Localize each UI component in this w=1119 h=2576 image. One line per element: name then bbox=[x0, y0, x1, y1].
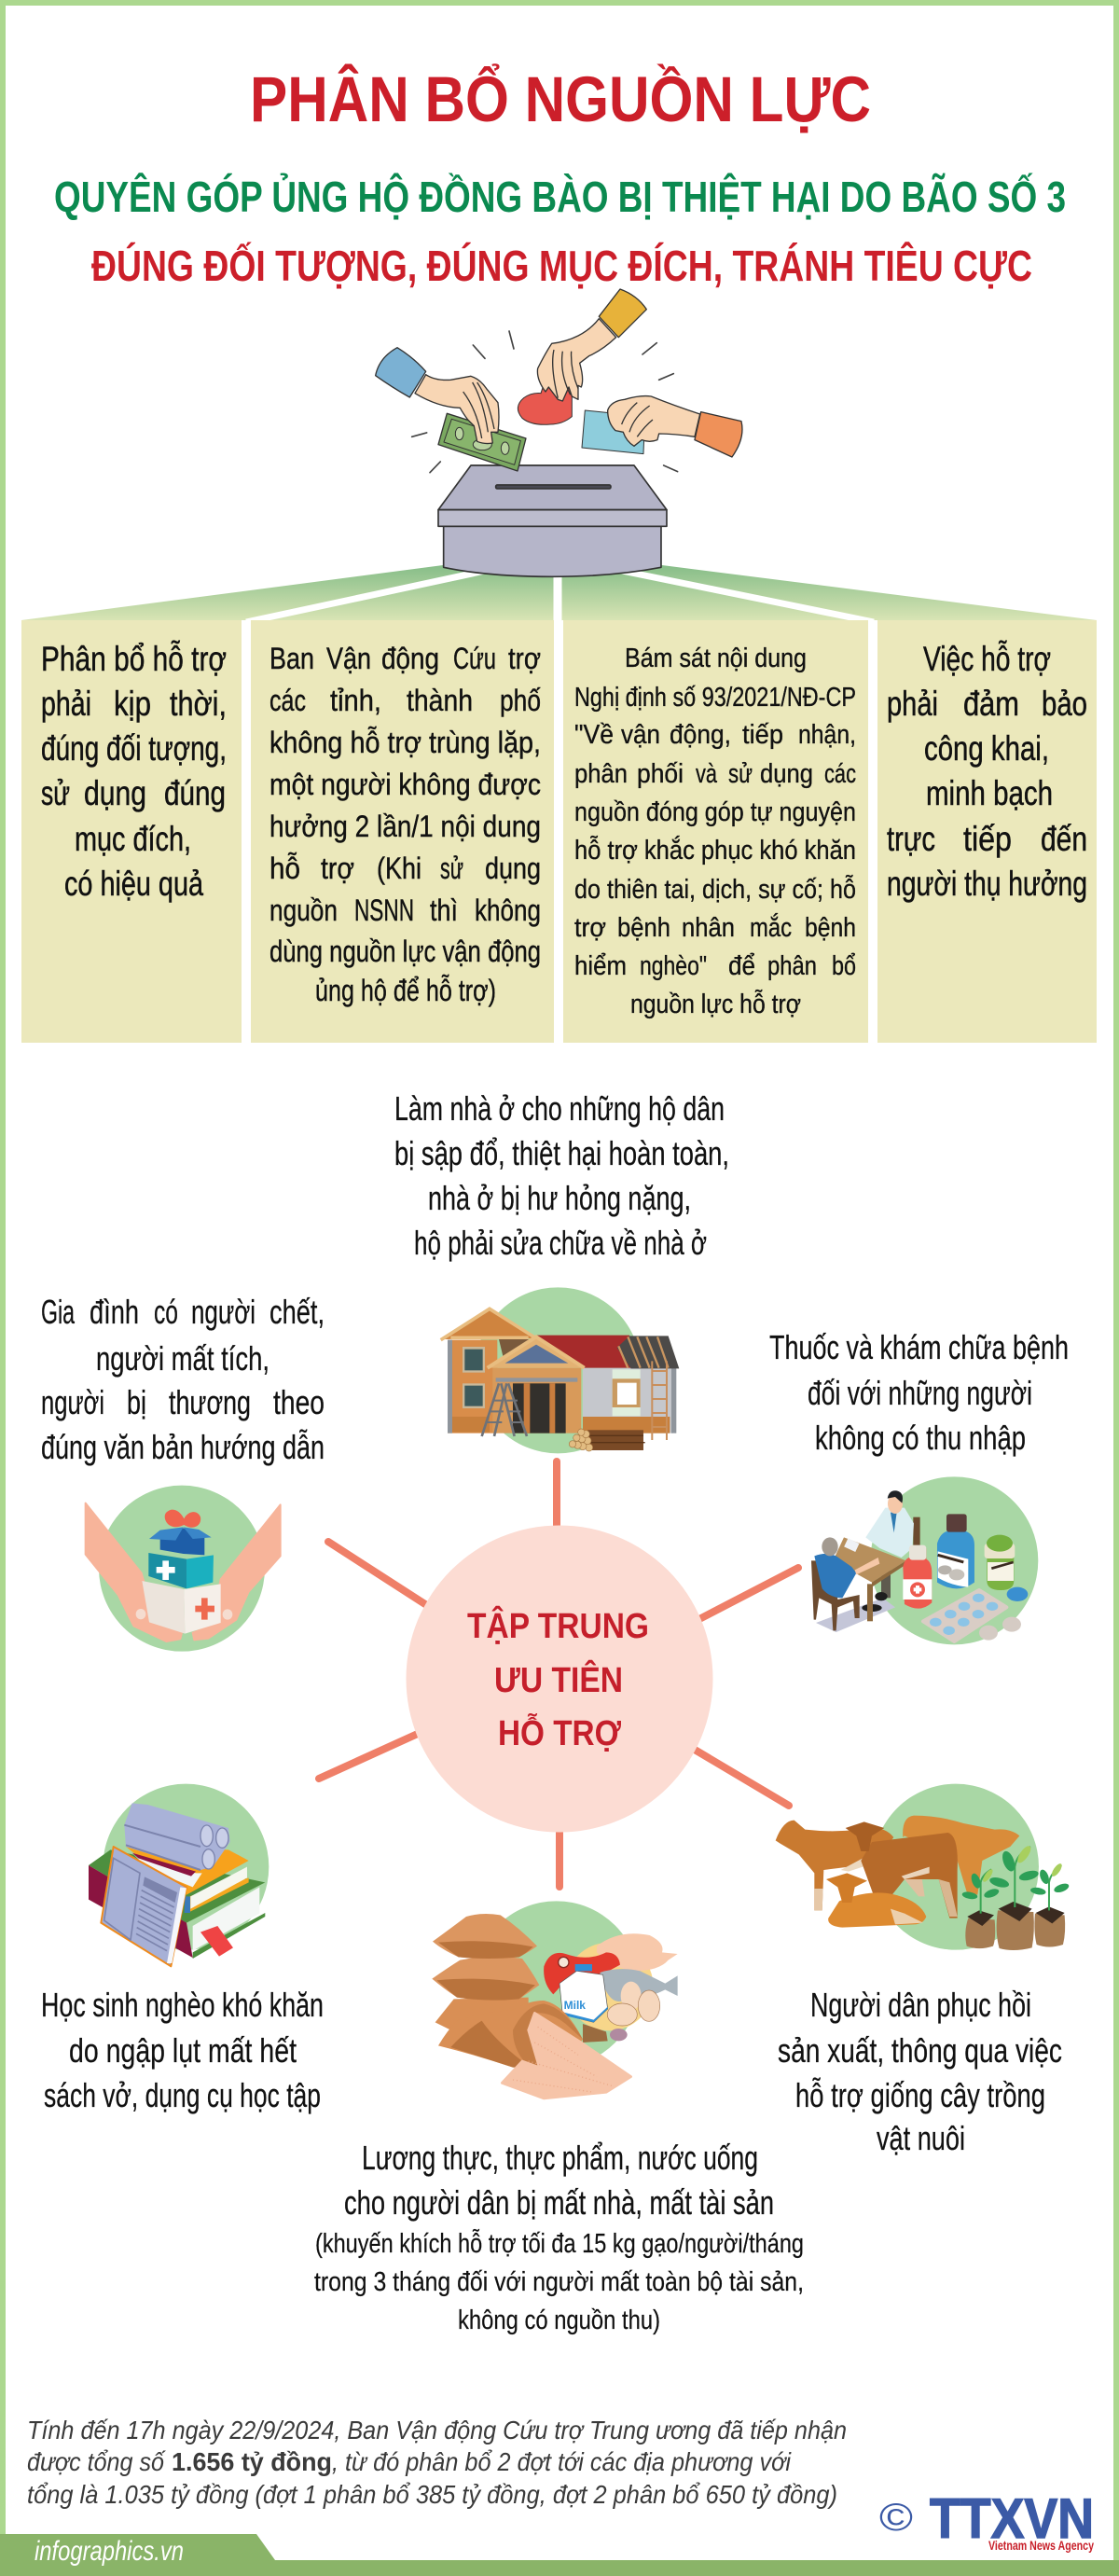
card 2 text: một người không được bbox=[269, 768, 541, 801]
card 3 text: hiểm bbox=[574, 951, 627, 981]
centre circle: priority support bbox=[407, 1526, 712, 1832]
card 3 text: Bám sát nội dung bbox=[625, 644, 807, 673]
card 3 text: nguồn đóng góp tự nguyện bbox=[574, 797, 856, 827]
card 2 text: động bbox=[381, 642, 439, 675]
logo: TTXVN bbox=[879, 2487, 1094, 2553]
site name: infographics.vn bbox=[35, 2536, 184, 2567]
text: livelihood recovery: Người dân phục hồi bbox=[810, 1986, 1031, 2024]
card 4 text: công khai, bbox=[924, 729, 1049, 768]
card 2 text: trợ bbox=[508, 642, 541, 675]
icon: food supplies bbox=[432, 1901, 678, 2098]
card 1 text: dụng bbox=[84, 774, 146, 812]
copyright mark: © bbox=[879, 2495, 913, 2539]
text: livelihood recovery: vật nuôi bbox=[877, 2119, 965, 2157]
red heart bbox=[518, 370, 572, 424]
text: casualties: người bbox=[41, 1383, 104, 1421]
card 4 text: Việc hỗ trợ bbox=[923, 640, 1051, 678]
spokes linking centre to topics bbox=[319, 1461, 798, 1887]
card 1 text: phải bbox=[41, 685, 91, 723]
footnote: Tính đến 17h ngày 22/9/2024, Ban Vận động Cứu trợ Trung ương đã tiếp nhận bbox=[27, 2416, 847, 2444]
text: livelihood recovery: hỗ trợ giống cây trồng bbox=[795, 2076, 1045, 2114]
card 2 text: ủng hộ để hỗ trợ) bbox=[315, 974, 496, 1007]
text: medicine: đối với những người bbox=[808, 1374, 1032, 1412]
card 2 text: các bbox=[269, 684, 306, 717]
card 3 text: bệnh bbox=[617, 913, 670, 943]
card 3 text: các bbox=[824, 759, 856, 789]
card 2 text: không bbox=[475, 893, 541, 927]
card 2 text bbox=[269, 642, 541, 1007]
card 2 text: nguồn bbox=[269, 893, 338, 927]
card 1 text bbox=[41, 640, 227, 903]
text: medicine bbox=[769, 1328, 1069, 1457]
card 3 text: nguồn lực hỗ trợ bbox=[630, 989, 801, 1019]
blue sleeve hand bbox=[376, 348, 499, 444]
text: students: sách vở, dụng cụ học tập bbox=[44, 2076, 321, 2114]
card 3 text: nhân bbox=[682, 913, 735, 943]
text: students: Học sinh nghèo khó khăn bbox=[41, 1986, 324, 2024]
text: casualties bbox=[41, 1293, 325, 1466]
card 2 text: sử bbox=[440, 852, 463, 885]
card 2 text: trợ bbox=[321, 852, 354, 885]
card 4 text: đảm bbox=[963, 685, 1019, 723]
card 2 text: dụng bbox=[485, 852, 541, 885]
card 3 text: phân bbox=[767, 951, 817, 981]
motion dashes bbox=[412, 331, 678, 473]
card 3 text: nghèo" bbox=[640, 951, 707, 981]
card 4 text: tiếp bbox=[963, 820, 1012, 858]
donation box bbox=[438, 465, 667, 576]
text: students bbox=[41, 1986, 324, 2114]
food note: (khuyến khích hỗ trợ tối đa 15 kg gạo/người/tháng bbox=[315, 2228, 804, 2259]
footnote: tổng là 1.035 tỷ đồng (đợt 1 phân bổ 385 tỷ đồng, đợt 2 phân bổ 650 tỷ đồng) bbox=[27, 2480, 837, 2509]
food main text bbox=[344, 2139, 774, 2222]
card 1 text: đúng đối tượng, bbox=[41, 729, 227, 768]
text: casualties: đình bbox=[90, 1293, 139, 1331]
card 4 text: đến bbox=[1041, 820, 1087, 858]
panel: card 1 bbox=[21, 620, 242, 1043]
text: casualties: người bbox=[191, 1293, 256, 1331]
centre heading: TẬP TRUNG bbox=[467, 1605, 649, 1646]
icon: cattle and seedlings bbox=[776, 1784, 1070, 1950]
orange sleeve hand bbox=[608, 396, 742, 457]
icon: hands holding medical gift bbox=[86, 1486, 281, 1652]
card 2 text: Cứu bbox=[453, 642, 496, 675]
text: casualties: Gia bbox=[41, 1293, 76, 1331]
footnote: 1.656 tỷ đồng bbox=[172, 2447, 332, 2476]
card 1 text: thời, bbox=[170, 685, 227, 723]
text: housing: nhà ở bị hư hỏng nặng, bbox=[428, 1179, 691, 1217]
card 1 text: đúng bbox=[164, 774, 226, 812]
card 4 text: trực bbox=[887, 820, 935, 858]
card 3 text: trợ bbox=[574, 913, 606, 943]
card 3 text: để bbox=[728, 951, 755, 981]
card 3 text: phối bbox=[637, 759, 684, 789]
centre heading: HỖ TRỢ bbox=[498, 1711, 622, 1753]
centre heading: ƯU TIÊN bbox=[494, 1659, 623, 1700]
text: casualties: người mất tích, bbox=[96, 1339, 269, 1378]
milk label: Milk bbox=[564, 1999, 586, 2012]
text: casualties: có bbox=[154, 1293, 178, 1331]
card 3 text: bổ bbox=[832, 951, 856, 981]
text: housing: hộ phải sửa chữa về nhà ở bbox=[414, 1224, 707, 1262]
card 2 text: không hỗ trợ trùng lặp, bbox=[269, 726, 541, 759]
card 2 text: hỗ bbox=[269, 852, 300, 885]
icon: house under repair bbox=[441, 1287, 679, 1453]
card 4 text bbox=[887, 640, 1087, 903]
icon: books and school supplies bbox=[89, 1784, 269, 1966]
card 3 text: và bbox=[696, 759, 718, 789]
blue card bbox=[582, 410, 645, 454]
text: medicine: không có thu nhập bbox=[815, 1419, 1026, 1457]
food main text: Lương thực, thực phẩm, nước uống bbox=[362, 2139, 758, 2177]
footnote: được tổng số bbox=[27, 2447, 166, 2476]
text: casualties: chết, bbox=[269, 1293, 325, 1331]
card 1 text: mục đích, bbox=[75, 820, 191, 858]
text: casualties: theo bbox=[273, 1383, 325, 1421]
card 3 text: "Về bbox=[574, 720, 614, 750]
food note: không có nguồn thu) bbox=[458, 2306, 660, 2335]
card 3 text: hỗ trợ khắc phục khó khăn bbox=[574, 835, 856, 866]
card 3 text: do thiên tai, dịch, sự cố; hỗ bbox=[574, 874, 856, 905]
card 2 text: NSNN bbox=[354, 893, 414, 927]
card 2 text: thì bbox=[430, 893, 458, 927]
card 2 text: tỉnh, bbox=[330, 684, 381, 717]
text: casualties: bị bbox=[127, 1383, 146, 1421]
text: food bbox=[314, 2139, 804, 2335]
food note bbox=[314, 2228, 804, 2335]
card 2 text: dùng nguồn lực vận động bbox=[269, 935, 541, 968]
yellow sleeve hand bbox=[537, 289, 646, 401]
text: housing: bị sập đổ, thiệt hại hoàn toàn, bbox=[394, 1134, 729, 1172]
food main text: cho người dân bị mất nhà, mất tài sản bbox=[344, 2183, 774, 2222]
card 3 text: sử bbox=[728, 759, 753, 789]
card 3 text bbox=[574, 644, 856, 1019]
card 2 text: Vận bbox=[326, 642, 371, 675]
text: livelihood recovery bbox=[778, 1986, 1062, 2157]
icon: hands donating into box bbox=[376, 289, 742, 576]
card 2 text: thành bbox=[407, 684, 473, 717]
text: housing bbox=[394, 1089, 729, 1262]
card 4 text: phải bbox=[887, 685, 938, 723]
card 3 text: tiếp bbox=[742, 720, 783, 750]
food note: trong 3 tháng đối với người mất toàn bộ tài sản, bbox=[314, 2267, 804, 2297]
title: PHÂN BỔ NGUỒN LỰC bbox=[250, 63, 871, 135]
agency wordmark: TTXVN bbox=[930, 2487, 1094, 2550]
footer bar with site name bbox=[0, 2534, 1119, 2576]
card 3 text: bệnh bbox=[805, 913, 856, 943]
footnote bbox=[27, 2416, 847, 2509]
panel: card 2 bbox=[251, 620, 554, 1043]
card 3 text: phân bbox=[574, 759, 628, 789]
fan: green connector from box to cards bbox=[21, 565, 1097, 620]
centre heading bbox=[467, 1605, 649, 1753]
card 3 text: động, bbox=[670, 720, 731, 750]
text: students: do ngập lụt mất hết bbox=[69, 2031, 297, 2070]
card 1 text: kịp bbox=[114, 685, 151, 723]
text: casualties: đúng văn bản hướng dẫn bbox=[41, 1428, 325, 1466]
icon: doctor and medicines bbox=[811, 1476, 1038, 1644]
card 2 text: (Khi bbox=[377, 852, 421, 885]
card 2 text: phố bbox=[500, 684, 541, 717]
footnote: , từ đó phân bổ 2 đợt tới các địa phương với bbox=[332, 2447, 792, 2476]
card 3 text: nhận, bbox=[798, 720, 856, 750]
card 2 text: Ban bbox=[269, 642, 314, 675]
card 2 text: hưởng 2 lần/1 nội dung bbox=[269, 810, 541, 843]
text: housing: Làm nhà ở cho những hộ dân bbox=[394, 1089, 725, 1128]
text: casualties: thương bbox=[169, 1383, 251, 1421]
card 1 text: Phân bổ hỗ trợ bbox=[41, 640, 227, 678]
card 1 text: sử bbox=[41, 774, 70, 812]
card 1 text: có hiệu quả bbox=[64, 865, 203, 903]
panel: card 4 bbox=[877, 620, 1097, 1043]
card 3 text: vận bbox=[621, 720, 660, 750]
panel: card 3 bbox=[563, 620, 868, 1043]
card 3 text: mắc bbox=[750, 912, 792, 943]
card 4 text: minh bạch bbox=[926, 774, 1053, 812]
card 4 text: bảo bbox=[1042, 685, 1087, 723]
card 3 text: Nghị định số 93/2021/NĐ-CP bbox=[574, 683, 856, 713]
banknote bbox=[438, 413, 526, 471]
card 3 text: dụng bbox=[760, 759, 813, 789]
